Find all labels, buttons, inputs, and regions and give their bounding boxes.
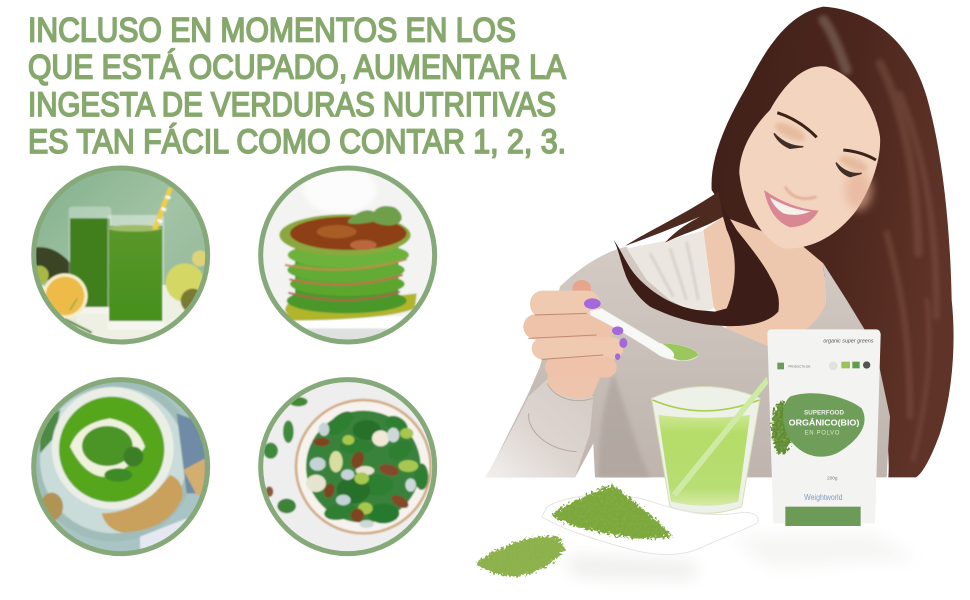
- pack product name: ORGÁNICO(BIO): [789, 418, 860, 428]
- left brow: [843, 150, 876, 160]
- green circle frames: [34, 168, 435, 554]
- palm and wrist: [547, 333, 603, 399]
- powder on spoon: [662, 343, 698, 360]
- hand: [523, 280, 623, 399]
- pack green footer: [785, 507, 861, 526]
- ring finger: [532, 337, 623, 359]
- product pack: [767, 329, 881, 526]
- glass: [652, 377, 768, 513]
- pack heading: SUPERFOOD: [804, 410, 844, 417]
- photo: green soup: [36, 382, 206, 552]
- hair wisps: [625, 192, 723, 246]
- woman back hair: [712, 7, 954, 477]
- face: [739, 66, 880, 248]
- neck: [703, 217, 826, 348]
- pack tagline: organic super greens: [823, 339, 874, 345]
- hair highlights: [823, 20, 937, 460]
- thumb tip: [572, 280, 591, 297]
- straw: [672, 377, 768, 497]
- title: [28, 12, 566, 161]
- front hair lock and band: [613, 200, 779, 326]
- right brow: [777, 113, 817, 137]
- nose shadow: [785, 187, 817, 199]
- sweater shadow: [598, 373, 650, 477]
- sweater: [487, 247, 890, 477]
- dish: [542, 495, 758, 554]
- title: INGESTA DE VERDURAS NUTRITIVAS: [28, 86, 556, 124]
- finger creases: [528, 313, 603, 359]
- white shirt panel: [627, 231, 713, 313]
- food photo circles: [30, 165, 438, 557]
- loose powder: [476, 536, 565, 577]
- mouth: [764, 190, 819, 227]
- little finger: [545, 357, 617, 377]
- title: ES TAN FÁCIL COMO CONTAR 1, 2, 3.: [28, 123, 566, 161]
- certification logos: [777, 361, 870, 370]
- photo: green smoothies: [36, 170, 206, 340]
- face shading: [845, 170, 872, 210]
- teeth: [770, 197, 811, 215]
- spoon: [590, 308, 698, 361]
- sleeve cuff: [529, 383, 593, 452]
- powder pile on dish: [552, 486, 673, 539]
- eye: [774, 133, 803, 148]
- eye shadow: [772, 119, 869, 173]
- middle finger: [523, 314, 617, 339]
- eye: [836, 163, 862, 177]
- photo: green pancakes: [263, 172, 432, 340]
- pack subtitle: EN POLVO: [805, 431, 840, 437]
- table shadows: [563, 533, 920, 578]
- index finger: [530, 291, 600, 317]
- photo: spinach salad: [263, 382, 432, 551]
- table edge: [470, 478, 970, 595]
- certification logos: PRODUCTO DE: [788, 364, 810, 368]
- title: INCLUSO EN MOMENTOS EN LOS: [28, 12, 516, 50]
- shirt folds: [650, 242, 698, 300]
- powder on pack: [772, 402, 792, 455]
- sweater sleeve: [485, 377, 593, 477]
- green blob label: [783, 393, 865, 457]
- pack brand: Weightworld: [804, 492, 843, 502]
- photo: woman and product, drawn in 3x coordinates: [470, 7, 970, 595]
- title: QUE ESTÁ OCUPADO, AUMENTAR LA: [28, 48, 566, 86]
- pack weight: 200g: [827, 475, 838, 480]
- purple nails: [584, 298, 627, 360]
